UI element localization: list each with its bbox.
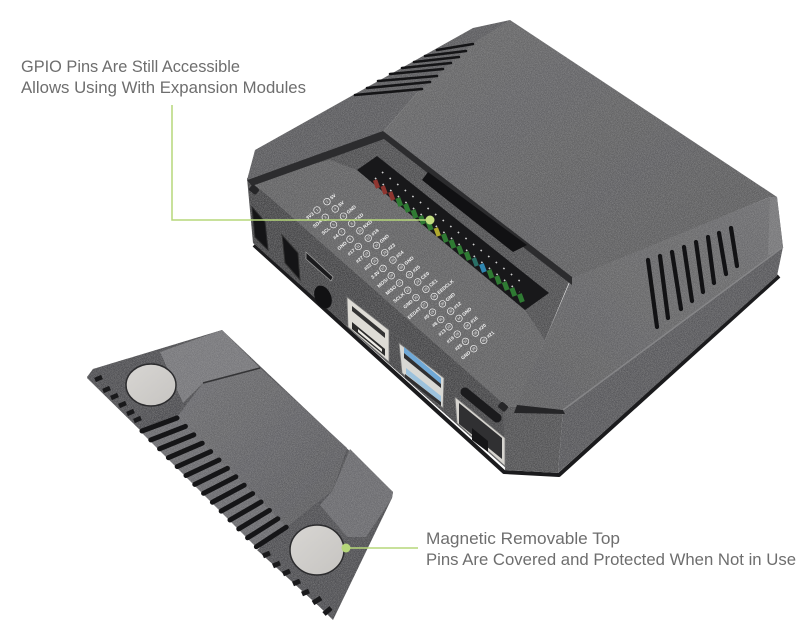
GPIO pin labels: 23 [405, 287, 411, 293]
label panel [250, 160, 545, 407]
dark corner front [257, 505, 366, 619]
corner screw left [248, 184, 260, 195]
main case [247, 20, 783, 475]
GPIO header [357, 156, 549, 310]
USB-C port [306, 252, 333, 281]
GPIO pin labels: GND [403, 255, 416, 267]
GPIO pin labels: GND [402, 299, 415, 310]
GPIO pin labels: TXD [354, 212, 366, 223]
end slots front [263, 553, 331, 614]
GPIO pin labels: 28 [432, 294, 437, 299]
USB 2 ports [347, 297, 389, 362]
GPIO pin labels: MISO [385, 284, 398, 297]
GPIO pin labels: SCL [321, 226, 332, 237]
GPIO pin labels: #23 [387, 242, 397, 252]
dark stripe at corner [514, 405, 565, 414]
GPIO pin labels: #17 [347, 248, 357, 258]
USB 2 slot upper [352, 306, 385, 338]
GPIO pin labels: 5 [332, 222, 336, 227]
GPIO pin labels: #4 [332, 233, 340, 241]
rear vents [355, 44, 473, 95]
lid main face [177, 368, 347, 527]
GPIO pin labels: 3 [323, 215, 327, 219]
caption line 1: GPIO Pins Are Still Accessible [21, 57, 240, 76]
USB 2 slot lower [352, 322, 385, 356]
GPIO pin labels: #6 [431, 321, 439, 329]
USB 2 tongue lower [358, 329, 382, 352]
GPIO pin labels: 15 [372, 258, 378, 264]
GPIO pin labels: 16 [382, 250, 388, 255]
USB 3 shell [399, 343, 444, 408]
GPIO pin labels: 17 [380, 266, 386, 271]
leader path [172, 105, 430, 220]
ethernet socket [459, 403, 502, 459]
leader dot [426, 216, 434, 224]
caption: GPIO pins [21, 57, 306, 97]
dark corner rear [87, 352, 190, 430]
yellow pin [436, 228, 439, 236]
GPIO pin labels: 26 [423, 286, 429, 292]
corner screw right [497, 401, 509, 412]
lower side band [558, 247, 783, 473]
caption line 2: Allows Using With Expansion Modules [21, 78, 306, 97]
GPIO pin labels: #25 [412, 264, 422, 274]
audio jack [311, 283, 335, 311]
GPIO pin labels: #5 [423, 313, 431, 322]
caption line 1: Magnetic Removable Top [426, 529, 620, 548]
GPIO pin labels: #20 [478, 323, 488, 333]
USB 3 blue upper [404, 347, 441, 384]
pin tips upper row [382, 172, 526, 286]
GPIO pin labels: 40 [481, 338, 487, 343]
recess shadow wall [247, 131, 572, 285]
teal pin [474, 258, 477, 266]
GPIO pin labels: GND [460, 350, 473, 361]
GPIO pin labels: 32 [448, 308, 454, 314]
caption: magnetic top [426, 529, 796, 569]
GPIO pin labels: EEDAT [407, 306, 423, 321]
ethernet port [455, 397, 505, 466]
magnet leader dot [342, 544, 350, 552]
GPIO pin labels: #19 [446, 335, 456, 345]
GPIO pin labels: EEDCLK [436, 278, 456, 296]
GPIO pin labels: 22 [407, 272, 412, 277]
GPIO pin labels: 5V [329, 192, 338, 201]
GPIO pin labels: 3V3 [305, 211, 316, 221]
GPIO pin labels: 30 [440, 301, 445, 307]
GPIO slot in lid [422, 172, 527, 252]
magnet leader line [342, 544, 418, 552]
GPIO pin labels: 13 [364, 251, 369, 256]
USB 3 blue lower [406, 368, 441, 402]
GPIO pin labels: GND [379, 233, 391, 245]
GPIO pin labels: CE1 [428, 278, 439, 289]
GPIO pin labels: RXD [362, 219, 374, 230]
GPIO pin labels: #22 [363, 262, 373, 272]
GPIO pin labels: 9 [348, 237, 352, 241]
GPIO pin labels: 29 [430, 309, 435, 315]
GPIO pin labels: 10 [357, 228, 363, 234]
GPIO pin labels: #27 [355, 255, 365, 265]
top face [383, 20, 777, 278]
GPIO pin labels: MOSI [376, 277, 390, 289]
green pins [398, 198, 522, 302]
GPIO pin labels: 3.3V [370, 269, 382, 281]
band crease shadow [203, 368, 260, 383]
GPIO pin labels: #12 [453, 301, 463, 311]
GPIO pin labels: 33 [446, 324, 452, 329]
band highlight edge [563, 247, 783, 410]
raised band rear [160, 330, 260, 403]
GPIO pin labels: GND [346, 204, 358, 216]
case body [247, 20, 783, 473]
GPIO pin labels: 8 [350, 221, 354, 226]
fin slots [142, 418, 286, 547]
PoE connector [465, 392, 497, 418]
GPIO pin labels: 36 [465, 323, 470, 328]
GPIO pin labels: 31 [438, 317, 444, 322]
GPIO pin labels: 27 [422, 302, 427, 308]
GPIO pin labels: 12 [366, 235, 371, 241]
GPIO pin labels: 37 [463, 339, 468, 344]
GPIO pin labels: 19 [389, 273, 394, 278]
GPIO pin labels: GND [445, 292, 457, 303]
lid body [87, 330, 393, 620]
GPIO leader line [172, 105, 434, 224]
case bottom shadow edge [254, 245, 779, 475]
GPIO pin labels: CE0 [420, 271, 431, 281]
vented side face [517, 197, 783, 410]
recess floor [250, 136, 570, 407]
GPIO pin labels: 18 [390, 257, 396, 263]
USB 3 slot upper [404, 353, 441, 388]
GPIO pin labels: 1 [315, 208, 319, 212]
raised band front [320, 449, 393, 537]
GPIO pin labels: #21 [486, 330, 496, 340]
GPIO pin labels: 2 [325, 199, 329, 204]
removable lid [87, 330, 393, 620]
GPIO pin labels: 7 [340, 230, 344, 234]
USB 3 slot lower [405, 374, 441, 406]
pin tips lower row [375, 178, 519, 292]
right corner bevel [768, 197, 783, 256]
GPIO pin labels: 38 [473, 330, 478, 336]
GPIO pin labels: #18 [370, 228, 381, 238]
magnet front [290, 525, 344, 575]
lid base [87, 330, 393, 620]
GPIO pin labels: GND [336, 240, 349, 252]
GPIO pin labels: 14 [374, 243, 379, 248]
GPIO pin labels: #26 [454, 342, 464, 352]
port side face [247, 178, 517, 469]
ethernet shell [455, 397, 505, 466]
GPIO pin labels: 35 [455, 331, 460, 337]
GPIO pin labels: #16 [469, 315, 480, 325]
HDMI port 1 [252, 207, 268, 250]
header housing [357, 156, 549, 310]
GPIO pin labels: SCLK [392, 291, 407, 305]
sloped rear face [247, 20, 510, 180]
caption line 2: Pins Are Covered and Protected When Not in Use [426, 550, 796, 569]
side vents [648, 228, 737, 327]
USB 3 ports [399, 343, 444, 408]
ethernet latch [472, 428, 488, 452]
USB 2 shell [347, 297, 389, 362]
GPIO pin labels: 25 [413, 295, 419, 300]
GPIO pin labels: SDA [312, 218, 324, 230]
GPIO pin labels: 4 [333, 207, 337, 211]
front corner face [503, 404, 563, 473]
GPIO pin labels: 39 [471, 346, 477, 351]
GPIO pin labels: GND [461, 306, 474, 318]
magnet leader path [346, 547, 418, 549]
GPIO pin labels: 5V [337, 200, 346, 208]
blue pin [481, 264, 484, 272]
end slots rear [95, 377, 141, 421]
GPIO pin labels: #24 [395, 250, 405, 260]
GPIO pin labels: 11 [356, 244, 361, 249]
GPIO pin labels: 6 [341, 214, 346, 218]
GPIO pin labels: 34 [456, 316, 462, 321]
GPIO pin labels: 20 [399, 265, 404, 270]
HDMI port 2 [282, 235, 300, 280]
GPIO pin labels: #13 [437, 328, 448, 338]
magnet rear [126, 364, 176, 406]
GPIO pin labels [305, 192, 496, 361]
fin comb base [140, 417, 287, 548]
red pins [375, 180, 393, 200]
GPIO pin labels: 24 [415, 279, 421, 285]
GPIO pin labels: 21 [397, 280, 402, 286]
